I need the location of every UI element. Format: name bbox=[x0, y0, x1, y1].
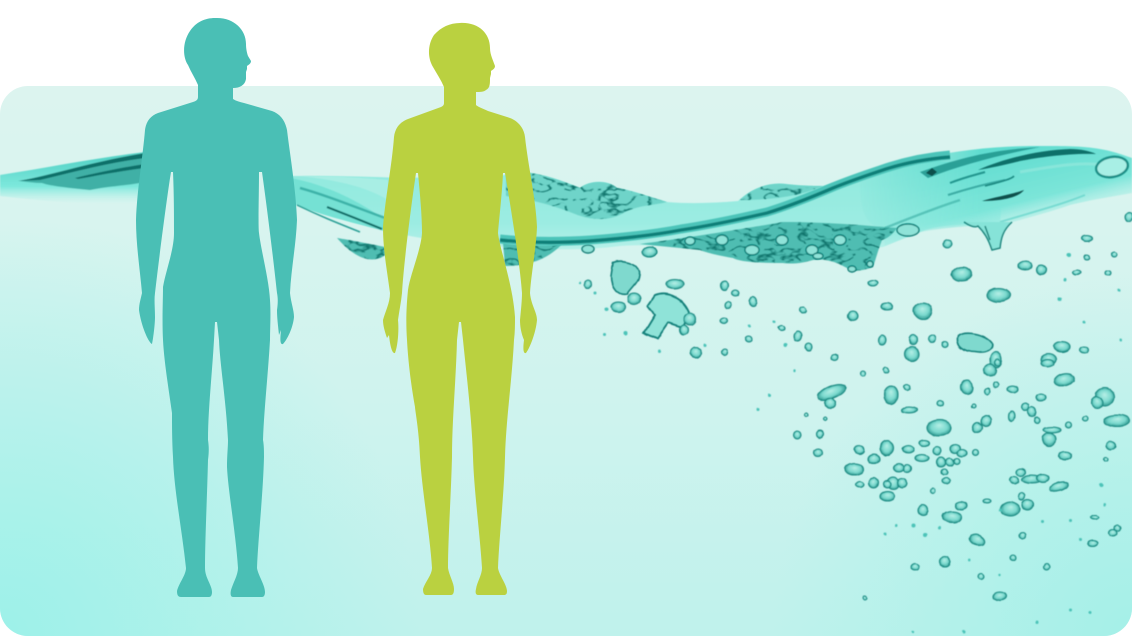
foam crown above crest bbox=[506, 172, 823, 219]
ring bubble in wave bbox=[1095, 154, 1129, 180]
tiny specks bbox=[579, 253, 1122, 634]
right wave streaks bbox=[920, 147, 1040, 178]
main dark crest line bbox=[500, 147, 1129, 250]
hanging drop bbox=[964, 222, 1012, 250]
male silhouette bbox=[136, 18, 297, 597]
bubbles near the surface bbox=[584, 212, 1132, 368]
left wave streaks bbox=[290, 176, 388, 232]
wave central body bbox=[280, 158, 1004, 251]
lower bubble cloud bbox=[793, 359, 1130, 600]
rising bubbles bbox=[579, 212, 1132, 634]
water surface wave bbox=[0, 146, 1132, 272]
foam under crest bbox=[337, 222, 897, 271]
foam rings bbox=[582, 224, 919, 272]
wave right section bbox=[860, 146, 1132, 246]
female silhouette bbox=[383, 23, 537, 595]
wave left section bbox=[0, 152, 143, 200]
